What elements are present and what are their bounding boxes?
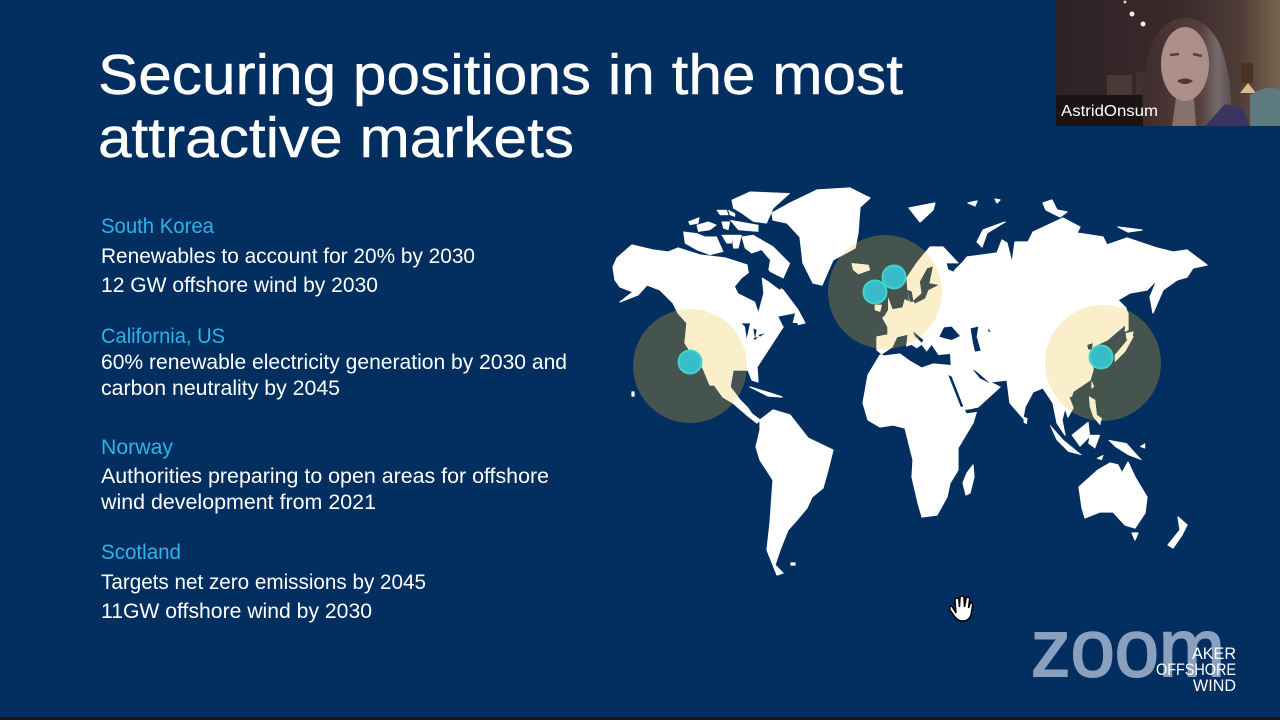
zoom watermark: zoom: [1031, 603, 1225, 694]
world map: [613, 188, 1207, 575]
highlight circles over land: [676, 242, 1134, 421]
speaker video thumbnail: [1056, 0, 1280, 126]
text block: Norway: Authorities preparing to open areas for offshore: [101, 465, 549, 488]
marker: Norway: [882, 266, 906, 288]
text block: Scotland: Targets net zero emissions by 2045: [101, 571, 426, 594]
inland seas: [735, 250, 1093, 413]
text block: Norway: wind development from 2021: [100, 491, 376, 514]
icon: hand cursor: [950, 596, 973, 621]
speaker name: AstridOnsum: [1061, 103, 1158, 120]
text block: South Korea: Renewables to account for 20% by 2030: [101, 245, 475, 268]
text block: California: carbon neutrality by 2045: [101, 377, 340, 400]
marker: South Korea: [1090, 346, 1112, 368]
text block: California: [101, 325, 567, 400]
text block: Scotland: Scotland: [101, 541, 181, 564]
text block: California: California, US: [101, 325, 225, 348]
text block: South Korea: South Korea: [101, 215, 214, 238]
text block: South Korea: [101, 215, 475, 297]
text block: South Korea: 12 GW offshore wind by 2030: [101, 274, 378, 297]
company logo: Aker Offshore Wind: AKER: [1192, 644, 1236, 663]
text block: Scotland: [101, 541, 426, 623]
text block: Norway: [100, 436, 549, 514]
title: attractive markets: [98, 106, 574, 170]
text block: Norway: Norway: [101, 436, 174, 459]
title: Securing positions in the most: [98, 43, 903, 107]
company logo: Aker Offshore Wind: WIND: [1193, 676, 1236, 695]
highlight circles over ocean: [633, 235, 1161, 423]
inland seas inside highlights: [890, 266, 1093, 350]
marker: Scotland: [864, 280, 886, 304]
marker: California: [678, 350, 702, 374]
company logo: Aker Offshore Wind: OFFSHORE: [1156, 660, 1236, 679]
bottom screen edge: [0, 717, 1280, 720]
title: [98, 43, 903, 170]
text block: Scotland: 11GW offshore wind by 2030: [101, 600, 372, 623]
continents: [613, 188, 1207, 575]
company logo: Aker Offshore Wind: [1156, 644, 1236, 695]
text block: California: 60% renewable electricity generation by 2030 and: [101, 351, 567, 374]
